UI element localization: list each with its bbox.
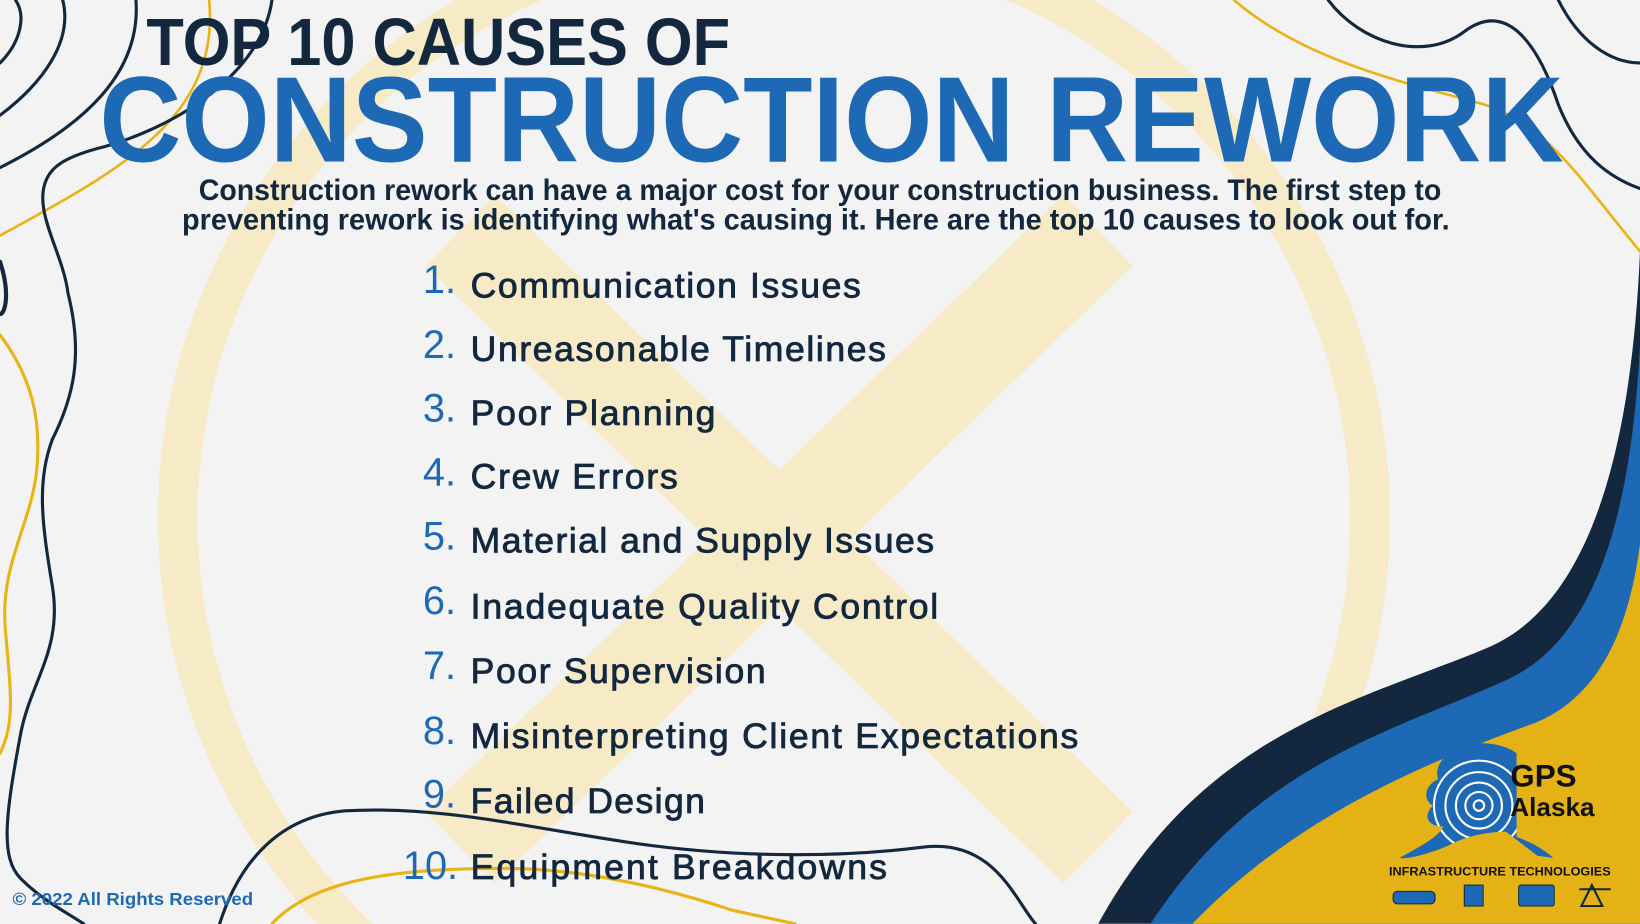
background watermark: faded prohibition circle with X [178,0,1370,924]
subtitle [182,174,1450,236]
list of causes: Misinterpreting Client Expectations [471,716,1078,756]
list of causes: Unreasonable Timelines [471,329,886,369]
list of causes: 8. [423,709,456,753]
subtitle: preventing rework is identifying what's causing it. Here are the top 10 causes to look out for. [182,203,1450,236]
logo: GPS Alaska: GPS [1510,759,1577,794]
list of causes: Crew Errors [471,457,678,497]
list of causes: Poor Supervision [471,651,766,691]
list of causes: Failed Design [471,781,705,821]
logo: GPS Alaska: INFRASTRUCTURE TECHNOLOGIES [1389,867,1611,879]
list of causes: 1. [423,258,456,302]
icons: equipment [1393,885,1611,906]
list of causes: Communication Issues [471,265,861,305]
copyright: © 2022 All Rights Reserved [13,889,253,909]
list of causes [403,258,1078,888]
logo: GPS Alaska [1389,743,1611,906]
list of causes: 2. [423,323,456,367]
list of causes: 9. [423,773,456,817]
list of causes: Equipment Breakdowns [471,847,887,887]
title line 1: TOP 10 CAUSES OF [146,5,730,80]
logo: GPS Alaska: Alaska [1510,792,1595,822]
list of causes: 3. [423,387,456,431]
list of causes: Inadequate Quality Control [471,586,938,626]
list of causes: 4. [423,451,456,495]
list of causes: 7. [423,644,456,688]
title line 2: CONSTRUCTION REWORK [99,51,1564,187]
subtitle: Construction rework can have a major cost for your construction business. The first step to [199,174,1441,207]
list of causes: Material and Supply Issues [471,520,934,560]
list of causes: Poor Planning [471,393,715,433]
list of causes: 5. [423,514,456,558]
list of causes: 6. [423,579,456,623]
list of causes: 10. [403,844,458,888]
bottom right corner bands [1098,251,1640,924]
